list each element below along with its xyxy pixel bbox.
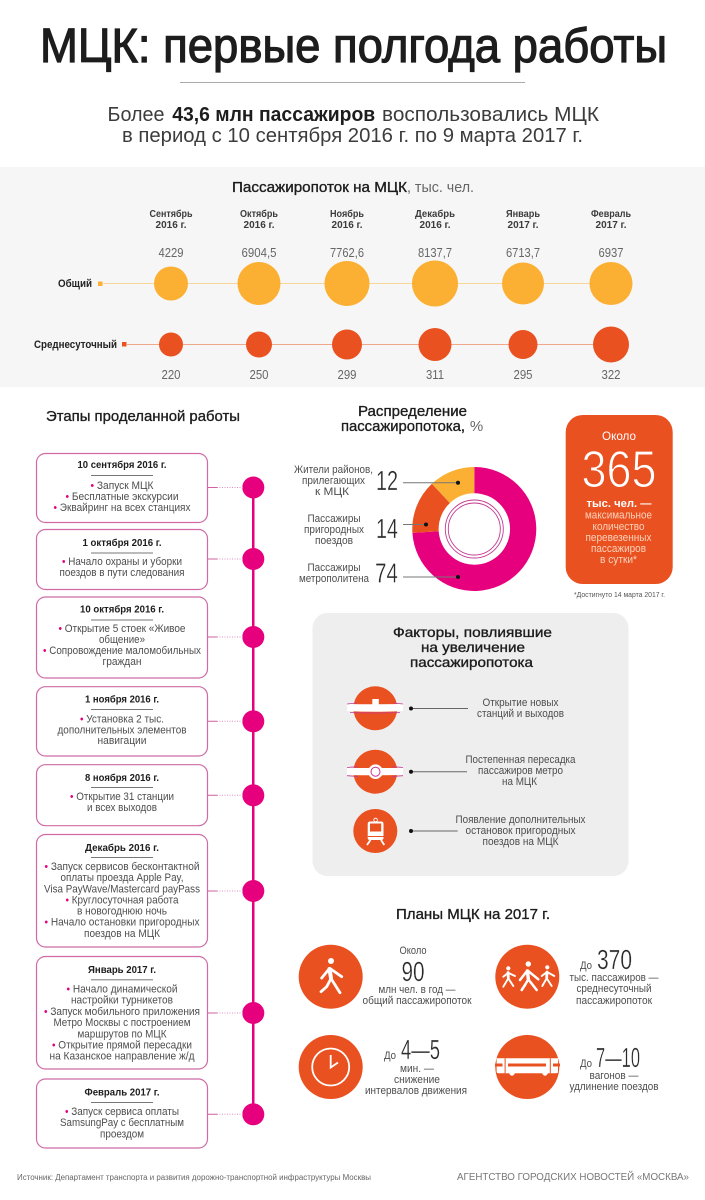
card: 1 November [36,687,208,756]
callouts: distribution: Жители районов, [294,464,373,476]
card: 8 November: и всех выходов [87,802,157,814]
icon: clock [299,1035,363,1099]
plan: yearly flow: млн чел. в год — [378,984,456,996]
factor 3: Появление дополнительных [456,814,586,826]
panel: peak daily passengers: максимальное [585,510,652,522]
callouts: distribution: Пассажиры [308,562,361,574]
card: January: • Запуск мобильного приложения [44,1006,200,1018]
plan: interval: снижение [394,1074,440,1086]
plan: train length: удлинение поездов [570,1081,659,1093]
callouts: distribution: метрополитена [299,573,370,585]
agency credit: АГЕНТСТВО ГОРОДСКИХ НОВОСТЕЙ «МОСКВА» [457,1170,689,1183]
card: January: • Открытие прямой пересадки [52,1039,192,1051]
card: 10 September: • Запуск МЦК [90,480,154,492]
card: 8 November: • Открытие 31 станции [70,791,174,803]
total values: 6904,5 [242,245,276,260]
total values: 6937 [598,245,624,260]
heading: distribution: пассажиропотока, [341,418,465,435]
daily values: 220 [162,367,180,382]
card: 1 October: поездов в пути следования [60,567,185,579]
heading: stages: Этапы проделанной работы [46,408,240,425]
plan: train length: 7—10 [596,1042,640,1073]
card: December: Декабрь 2016 г. [85,842,159,854]
subtitle [108,104,599,147]
callouts: distribution: Пассажиры [308,513,361,525]
plan: daily flow: 370 [597,944,632,975]
month labels: 2016 г. [156,219,187,231]
month labels: 2017 г. [508,219,539,231]
card: 1 October: • Начало охраны и уборки [62,556,182,568]
card: January: маршрутов по МЦК [78,1028,167,1040]
plan: daily flow: среднесуточный [576,983,652,995]
subtitle: 43,6 млн пассажиров [172,104,375,126]
callouts: distribution: пригородных [304,524,364,536]
icon: new stations [347,686,403,730]
plan: interval: 4—5 [401,1034,440,1065]
card: 10 October: общение» [99,634,145,646]
factors heading: пассажиропотока [410,654,533,670]
heading: distribution [341,403,483,435]
plan: interval [365,1034,467,1097]
daily values [162,367,620,382]
plan: daily flow [570,944,658,1007]
panel heading: Пассажиропоток на МЦК [232,180,408,196]
card: January: на Казанское направление ж/д [50,1051,195,1063]
panel: factors [312,613,628,876]
panel: peak daily passengers: 365 [582,441,656,499]
card: 10 October: граждан [102,656,142,668]
total values: 7762,6 [330,245,364,260]
plan: yearly flow: 90 [402,956,424,987]
row: daily average: Среднесуточный [34,339,117,351]
daily values: 299 [338,367,356,382]
card: February: • Запуск сервиса оплаты [65,1106,179,1118]
card: 10 September [36,454,208,522]
card: December: • Круглосуточная работа [66,895,179,907]
icon: three walkers [495,945,559,1009]
panel: peak daily passengers: в сутки* [600,554,638,566]
factor 2: пассажиров метро [478,765,563,777]
row: total: Общий [58,278,92,290]
subtitle: воспользовались МЦК [382,104,599,126]
heading: plans: Планы МЦК на 2017 г. [396,906,550,923]
month labels [150,208,631,231]
panel: peak daily passengers: пассажиров [591,543,646,555]
source: Источник: Департамент транспорта и развития дорожно-транспортной инфраструктуры Москвы [17,1173,371,1182]
callouts: distribution: 14 [376,513,398,544]
total values [158,245,624,260]
factor 2 [409,754,576,788]
panel: peak daily passengers: Около [602,429,636,443]
card: December: Visa PayWave/Mastercard payPass [44,883,200,895]
card: 1 November: дополнительных элементов [58,724,187,736]
factor 3 [409,814,586,848]
callouts: distribution [294,464,460,589]
daily values: 295 [514,367,532,382]
total values: 6713,7 [506,245,540,260]
card: December: поездов на МЦК [84,928,161,940]
panel: peak daily passengers: количество [592,521,644,533]
icon: metro transfer [347,750,403,794]
plan: train length: До [580,1058,592,1070]
timeline [208,476,264,1125]
plan: interval: интервалов движения [365,1085,467,1097]
card: February: SamsungPay с бесплатным [60,1117,184,1129]
icon: train [495,1035,560,1099]
daily values: 322 [602,367,620,382]
month labels: Декабрь [415,208,455,220]
card: 10 October: • Открытие 5 стоек «Живое [58,623,186,635]
subtitle: в период с 10 сентября 2016 г. по 9 марта 2017 г. [122,125,583,147]
title: МЦК: первые полгода работы [40,20,667,73]
factor 2: на МЦК [502,776,538,788]
month labels: Сентябрь [150,208,193,220]
card: December: в новогоднюю ночь [77,906,167,918]
panel: peak daily passengers [566,415,673,584]
callouts: distribution: к МЦК [315,486,350,498]
factors heading [393,624,552,670]
panel: peak daily passengers: перевезенных [586,532,652,544]
factor 1 [409,697,564,720]
callouts: distribution: 12 [376,465,398,496]
panel heading [232,180,474,196]
card: 10 September: • Эквайринг на всех станциях [54,502,191,514]
card: January: настройки турникетов [71,995,173,1007]
panel: peak daily passengers: тыс. чел. — [586,498,652,510]
factor 2: Постепенная пересадка [466,754,576,766]
card: December: оплаты проезда Apple Pay, [60,872,184,884]
month labels: 2017 г. [596,219,627,231]
card: 1 November: навигации [98,735,146,747]
plan: interval: мин. — [400,1063,434,1075]
card: 8 November [36,765,208,826]
icon: suburban train [353,809,397,853]
icon: walker [299,945,363,1009]
row: total [58,260,632,306]
card: 1 October [36,530,208,590]
plan: daily flow: пассажиропоток [576,995,652,1007]
month labels: Ноябрь [330,208,364,220]
heading: distribution: Распределение [358,403,467,420]
card: 10 October: 10 октября 2016 г. [80,604,164,616]
plan: interval: До [384,1050,396,1062]
plan: train length [570,1042,659,1093]
plan: yearly flow: общий пассажиропоток [362,995,472,1007]
month labels: 2016 г. [420,219,451,231]
card: January: • Начало динамической [66,984,178,996]
daily values: 250 [250,367,268,382]
footnote: *Достигнуто 14 марта 2017 г. [574,590,665,599]
month labels: 2016 г. [244,219,275,231]
month labels: Октябрь [240,208,278,220]
heading: distribution: % [470,418,483,435]
daily values: 311 [426,367,444,382]
card: January: Метро Москвы с построением [54,1017,190,1029]
callouts: distribution: поездов [315,535,353,547]
factors heading: Факторы, повлиявшие [393,624,552,640]
factor 3: поездов на МЦК [482,836,559,848]
card: December: • Запуск сервисов бесконтактной [44,861,200,873]
month labels: Январь [506,208,540,220]
total values: 4229 [158,245,184,260]
card: 10 October: • Сопровождение маломобильных [43,645,201,657]
row: daily average [34,326,629,362]
card: February: проездом [100,1128,144,1140]
factor 3: остановок пригородных [466,825,576,837]
factor 1: Открытие новых [482,697,559,709]
card: February: Февраль 2017 г. [84,1087,160,1099]
month labels: 2016 г. [332,219,363,231]
card: February [36,1079,208,1148]
factor 1: станций и выходов [477,708,564,720]
plan: daily flow: тыс. пассажиров — [570,972,658,984]
plan: train length: вагонов — [590,1070,638,1082]
card: January: Январь 2017 г. [88,964,156,976]
donut chart [412,467,536,591]
card: December [36,834,208,947]
card: 10 October [36,597,208,678]
callouts: distribution: 74 [375,558,398,589]
card: 1 November: 1 ноября 2016 г. [85,694,159,706]
plan: yearly flow [362,945,472,1007]
card: 8 November: 8 ноября 2016 г. [85,772,159,784]
plan: yearly flow: Около [400,945,426,957]
card: 10 September: • Бесплатные экскурсии [66,491,178,503]
callouts: distribution: прилегающих [302,475,365,487]
card: December: • Начало остановки пригородных [44,917,200,929]
total values: 8137,7 [418,245,452,260]
plan: daily flow: До [580,960,592,972]
card: 10 September: 10 сентября 2016 г. [78,459,167,471]
card: 1 October: 1 октября 2016 г. [82,537,162,549]
card: January [36,956,208,1069]
card: 1 November: • Установка 2 тыс. [80,713,164,725]
factors heading: на увеличение [421,639,525,655]
subtitle: Более [108,104,164,126]
panel: passenger flow band [0,167,705,387]
month labels: Февраль [591,208,631,220]
panel heading: , тыс. чел. [407,180,474,196]
